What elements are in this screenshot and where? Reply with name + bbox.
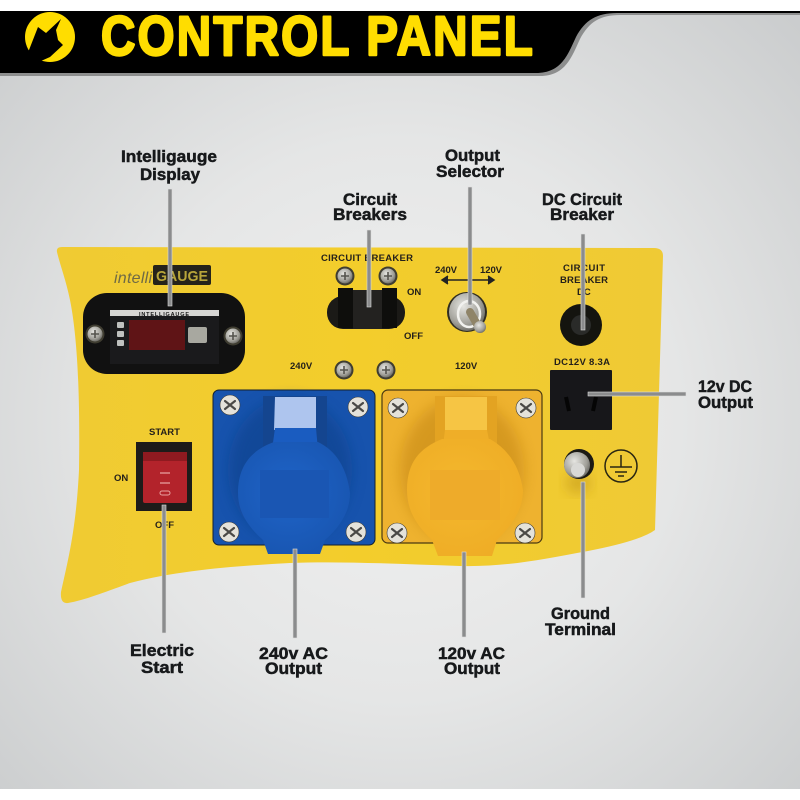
label: 240v ac output — [259, 644, 328, 678]
label: circuit breakers — [333, 190, 407, 224]
ground terminal — [564, 449, 594, 493]
label: dc circuit breaker — [542, 190, 622, 224]
label: intelligauge display: Intelligauge — [121, 147, 217, 166]
240v and 120v labels with screws: 240V — [290, 361, 313, 372]
240v blue socket — [213, 390, 375, 554]
label: 120v ac output: 120v AC — [438, 644, 505, 663]
label: output selector — [436, 146, 504, 181]
electric start switch: ON — [114, 473, 128, 484]
label: electric start: Electric — [130, 641, 194, 660]
dc socket: DC12V 8.3A — [554, 357, 610, 368]
output selector switch — [435, 265, 503, 333]
intelligauge logo: GAUGE — [156, 268, 208, 285]
label: 12v dc output: 12v DC — [698, 377, 752, 396]
label: 12v dc output — [698, 377, 753, 412]
label: 240v ac output: 240v AC — [259, 644, 328, 663]
label: dc circuit breaker: Breaker — [550, 205, 614, 224]
circuit breakers: CIRCUIT BREAKER — [321, 253, 413, 264]
label: dc circuit breaker: DC Circuit — [542, 190, 622, 209]
dc circuit breaker: CIRCUIT — [563, 263, 605, 274]
circuit breakers — [321, 253, 423, 342]
electric start switch: OFF — [155, 520, 174, 531]
dc circuit breaker: BREAKER — [560, 275, 608, 286]
label: circuit breakers: Circuit — [343, 190, 397, 209]
label: 120v ac output: Output — [444, 659, 500, 678]
label: circuit breakers: Breakers — [333, 205, 407, 224]
label: 120v ac output — [438, 644, 505, 678]
icon: earth symbol — [605, 450, 637, 482]
label: intelligauge display — [121, 147, 217, 184]
electric start switch — [114, 427, 192, 531]
display: INTELLIGAUGE — [139, 312, 189, 318]
leader lines — [162, 187, 686, 638]
display — [83, 265, 245, 374]
label: electric start: Start — [141, 658, 183, 677]
output selector switch: 120V — [480, 265, 503, 276]
label: output selector: Output — [445, 146, 500, 165]
240v and 120v labels with screws — [290, 360, 478, 380]
label: intelligauge display: Display — [140, 165, 201, 184]
label: 12v dc output: Output — [698, 393, 753, 412]
label: ground terminal: Ground — [551, 604, 610, 623]
electric start switch: START — [149, 427, 180, 438]
icon: logo — [18, 12, 75, 66]
label: electric start — [130, 641, 194, 677]
dc circuit breaker: DC — [577, 287, 591, 298]
output selector switch: 240V — [435, 265, 458, 276]
title: CONTROL PANEL — [101, 5, 533, 68]
circuit breakers: OFF — [404, 331, 423, 342]
240v and 120v labels with screws: 120V — [455, 361, 478, 372]
label: ground terminal: Terminal — [545, 620, 616, 639]
intelligauge logo — [114, 265, 211, 287]
label: output selector: Selector — [436, 162, 504, 181]
panel: yellow control panel — [57, 247, 663, 603]
120v yellow socket — [382, 390, 542, 556]
label: ground terminal — [545, 604, 616, 639]
circuit breakers: ON — [407, 287, 421, 298]
dc socket — [550, 357, 612, 430]
header banner — [0, 5, 800, 76]
dc circuit breaker — [560, 263, 608, 346]
label: 240v ac output: Output — [265, 659, 322, 678]
intelligauge logo: intelli — [114, 270, 152, 287]
